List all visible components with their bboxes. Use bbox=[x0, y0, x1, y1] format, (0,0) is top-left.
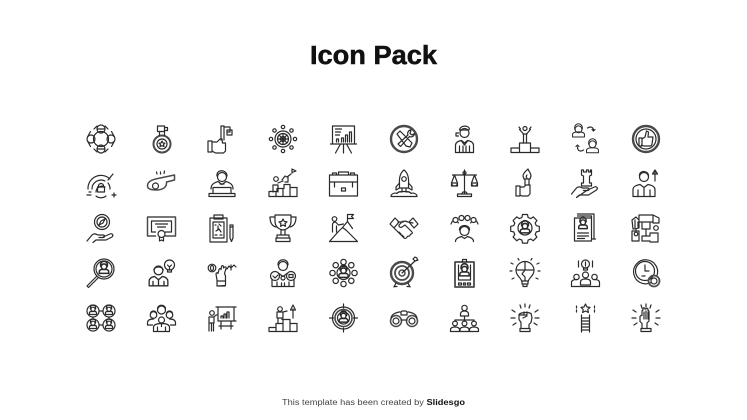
icon: whistle bbox=[148, 171, 174, 190]
icon: crosshair person bbox=[330, 304, 358, 332]
icon: customer exchange bbox=[573, 124, 598, 153]
icon: resume documents bbox=[574, 214, 596, 241]
icon: org hierarchy bbox=[450, 305, 478, 332]
icon: target with arrow bbox=[391, 257, 418, 287]
icon: man with lightbulb bbox=[149, 260, 174, 286]
icon: ladder with star bbox=[576, 304, 594, 332]
icon: team with idea bbox=[572, 260, 600, 286]
icon: climbing steps bbox=[269, 169, 297, 196]
icon: clipboard plan bbox=[210, 215, 233, 242]
icon: four connected people bbox=[87, 305, 115, 331]
icon: tools in circle bbox=[391, 126, 417, 152]
title: Icon Pack bbox=[310, 42, 438, 70]
icon: person with ideas bbox=[451, 216, 478, 242]
icon: lifebuoy team bbox=[87, 125, 115, 153]
icon: climbing steps with arrow bbox=[269, 305, 297, 332]
icon: hand holding chess rook bbox=[572, 170, 597, 198]
icon: consultant with badges bbox=[270, 260, 296, 286]
icon: performance gauge bbox=[87, 174, 116, 198]
icon: team group bbox=[148, 305, 176, 332]
icon: puzzle lightbulb bbox=[510, 258, 540, 286]
icon: trophy bbox=[270, 215, 296, 242]
icon: briefcase bbox=[330, 172, 358, 196]
icon: rocket launch bbox=[391, 170, 417, 196]
icon: team puzzle board bbox=[632, 215, 659, 242]
icon: person at laptop bbox=[209, 171, 235, 196]
icon: balance scales bbox=[452, 170, 478, 196]
icon: gear with person bbox=[511, 214, 539, 243]
icon: binoculars bbox=[390, 311, 418, 326]
icon: mountain flag bbox=[330, 214, 358, 242]
icon: certificate bbox=[148, 217, 176, 241]
icon: thumbs up with flag bbox=[208, 126, 232, 153]
icon: businessman with up arrow bbox=[633, 170, 658, 196]
icon: medal bbox=[154, 126, 170, 152]
icon: ID badge bbox=[455, 260, 474, 287]
icon: raised fist bbox=[511, 304, 539, 332]
icon: podium winner bbox=[511, 126, 539, 152]
icon: raised hand bbox=[632, 304, 660, 332]
icon: handshake bbox=[390, 218, 418, 238]
icon: network of people bbox=[330, 259, 357, 287]
icon: magnifier person bbox=[87, 259, 114, 288]
icon: presenter with chart bbox=[209, 307, 236, 331]
icon: hand with compass bbox=[87, 214, 113, 242]
icon grid bbox=[87, 124, 660, 332]
icon: woman with headset bbox=[456, 126, 474, 152]
footer credit: This template has been created by Slidesgo bbox=[282, 398, 465, 407]
icon: hand with coins and chart bbox=[208, 264, 236, 286]
icon: clock with gear bbox=[634, 260, 660, 286]
icon: torch in hand bbox=[516, 169, 531, 196]
icon: presentation board bbox=[330, 126, 356, 153]
icon: thumbs up badge bbox=[633, 126, 659, 152]
icon: ship wheel bbox=[269, 125, 297, 153]
